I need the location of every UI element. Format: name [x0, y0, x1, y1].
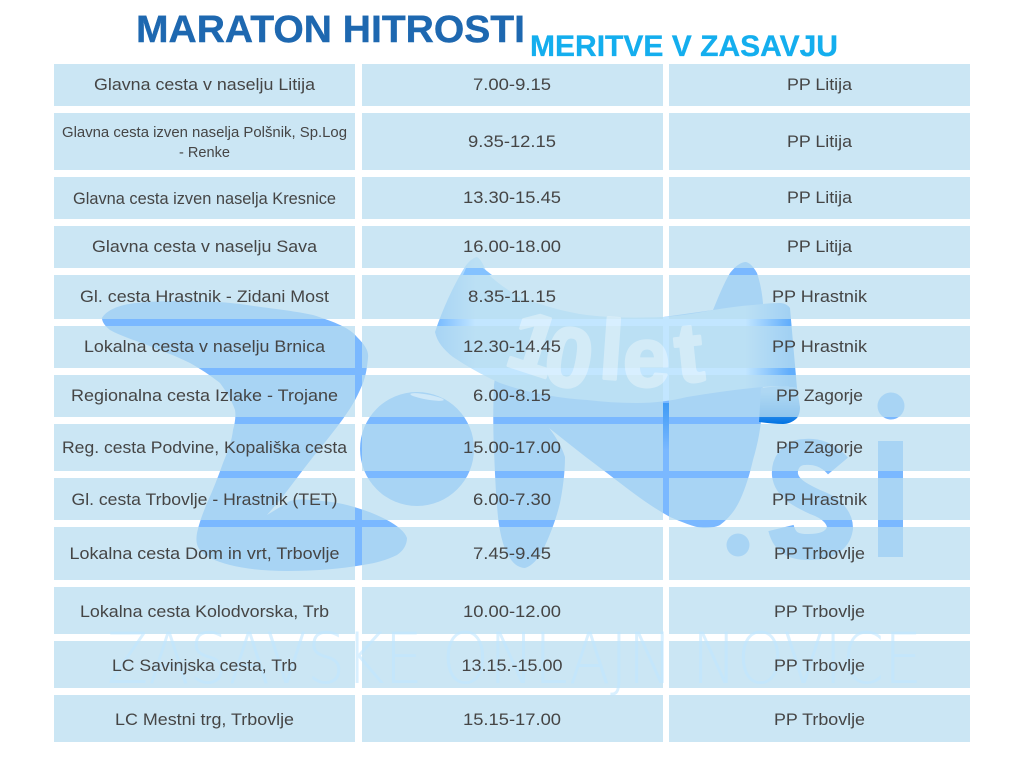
row 3: Glavna cesta izven naselja Kresnice	[73, 189, 336, 208]
logo letter O	[360, 392, 474, 506]
row 3: 13.30-15.45	[463, 188, 561, 207]
row 7	[71, 386, 863, 405]
row 1: 7.00-9.15	[473, 75, 551, 94]
row 8: Reg. cesta Podvine, Kopališka cesta	[62, 438, 348, 457]
row 13: 15.15-17.00	[463, 710, 561, 729]
row 7: Regionalna cesta Izlake - Trojane	[71, 386, 338, 405]
row 12: PP Trbovlje	[774, 656, 865, 675]
row 2: 9.35-12.15	[468, 132, 556, 151]
row 6: 12.30-14.45	[463, 337, 561, 356]
logo badge text: 10let	[497, 292, 708, 408]
row 2: Glavna cesta izven naselja Polšnik, Sp.Log	[62, 125, 347, 141]
logo letter N	[493, 262, 763, 568]
logo dot	[726, 534, 750, 556]
row 6: PP Hrastnik	[772, 337, 868, 356]
row 11: 10.00-12.00	[463, 602, 561, 621]
row 11: Lokalna cesta Kolodvorska, Trb	[80, 602, 329, 621]
row 12: LC Savinjska cesta, Trb	[112, 656, 297, 675]
row 7: 6.00-8.15	[473, 386, 551, 405]
row 11	[80, 602, 865, 621]
row 9: 6.00-7.30	[473, 490, 551, 509]
row 3: PP Litija	[787, 188, 853, 207]
logo ribbon dark tip	[759, 386, 800, 424]
row 1	[94, 75, 853, 94]
logo O highlight	[410, 392, 444, 402]
row 2	[62, 125, 853, 161]
logo slogan: ZASAVSKE ONLAJN NOVICE	[107, 619, 922, 700]
logo ribbon ear accent	[463, 268, 492, 275]
row 10: 7.45-9.45	[473, 544, 551, 563]
row 5	[80, 287, 868, 306]
row 7: PP Zagorje	[776, 386, 863, 405]
row 9: PP Hrastnik	[772, 490, 868, 509]
table cell backgrounds	[54, 64, 970, 742]
row 12: 13.15.-15.00	[462, 656, 562, 675]
row 4: 16.00-18.00	[463, 237, 561, 256]
row 9: Gl. cesta Trbovlje - Hrastnik (TET)	[72, 490, 338, 509]
logo letter s	[781, 452, 840, 547]
row 9	[72, 490, 868, 509]
row 5: 8.35-11.15	[468, 287, 556, 306]
row 10: PP Trbovlje	[774, 544, 865, 563]
row 8: 15.00-17.00	[463, 438, 561, 457]
logo letter Z	[102, 301, 407, 571]
logo centre accent	[663, 403, 669, 450]
row 4	[92, 237, 853, 256]
row 1: Glavna cesta v naselju Litija	[94, 75, 316, 94]
row 4: PP Litija	[787, 237, 853, 256]
row 2: PP Litija	[787, 132, 853, 151]
row 5: PP Hrastnik	[772, 287, 868, 306]
row 12	[112, 656, 865, 675]
logo ribbon	[435, 257, 797, 403]
row 3	[73, 188, 853, 208]
row 11: PP Trbovlje	[774, 602, 865, 621]
row 13: PP Trbovlje	[774, 710, 865, 729]
row 8: PP Zagorje	[776, 438, 863, 457]
row 10: Lokalna cesta Dom in vrt, Trbovlje	[70, 544, 340, 563]
watermark logo	[102, 257, 904, 571]
row 5: Gl. cesta Hrastnik - Zidani Most	[80, 287, 329, 306]
row 13	[115, 710, 865, 729]
row 1: PP Litija	[787, 75, 853, 94]
row 13: LC Mestni trg, Trbovlje	[115, 710, 294, 729]
row 6	[84, 337, 868, 356]
row 6: Lokalna cesta v naselju Brnica	[84, 337, 326, 356]
logo letter i dot	[878, 392, 904, 420]
logo letter i	[878, 441, 903, 557]
title: MARATON HITROSTI	[136, 9, 525, 51]
row 10	[70, 544, 865, 563]
row 8	[62, 438, 863, 457]
subtitle: MERITVE V ZASAVJU	[530, 30, 838, 63]
row 2: - Renke	[179, 145, 230, 161]
row 4: Glavna cesta v naselju Sava	[92, 237, 318, 256]
